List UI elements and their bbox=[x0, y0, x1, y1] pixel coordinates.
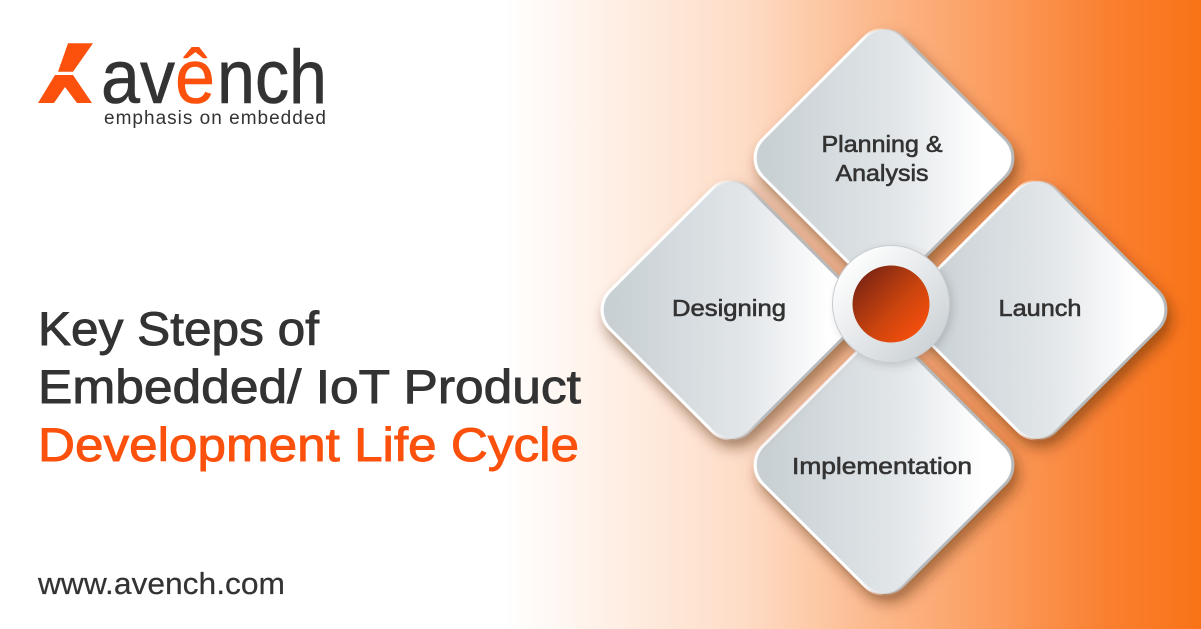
step: Planning and Analysis: Planning & bbox=[822, 131, 942, 157]
step: Implementation: Implementation bbox=[792, 453, 972, 479]
step: Implementation bbox=[744, 325, 1024, 605]
step: Designing bbox=[591, 170, 871, 450]
icon: logo K mark bbox=[38, 43, 93, 103]
step: Planning and Analysis: Analysis bbox=[836, 160, 928, 186]
title: Embedded/ IoT Product bbox=[38, 360, 581, 413]
title: Key Steps of bbox=[38, 302, 320, 355]
logo wordmark: av bbox=[101, 35, 175, 120]
logo wordmark: nch bbox=[217, 35, 327, 120]
step: Designing: Designing bbox=[672, 295, 786, 321]
website url: www.avench.com bbox=[37, 566, 285, 601]
center hub bbox=[832, 246, 950, 362]
step: Planning and Analysis bbox=[744, 18, 1024, 298]
title: Development Life Cycle bbox=[38, 418, 579, 471]
logo tagline: emphasis on embedded bbox=[104, 108, 326, 129]
step: Launch: Launch bbox=[998, 295, 1082, 321]
step: Launch bbox=[897, 170, 1177, 450]
title bbox=[38, 302, 581, 471]
logo wordmark bbox=[101, 35, 327, 120]
logo bbox=[38, 35, 327, 129]
logo wordmark: ê bbox=[175, 35, 215, 120]
